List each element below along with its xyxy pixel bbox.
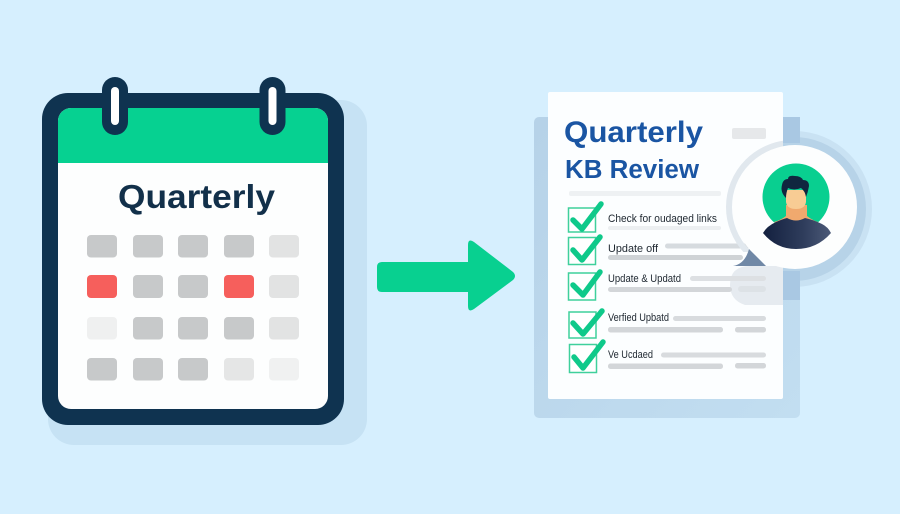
calendar ring left: [102, 77, 128, 135]
calendar page: [58, 108, 328, 409]
person shadow dark peak: [733, 249, 766, 266]
calendar frame: [42, 93, 344, 425]
item 1: Check for oudaged links: [608, 213, 718, 225]
white disc: [733, 145, 857, 269]
document title: KB Review: [565, 156, 699, 184]
divider bar: [569, 191, 721, 196]
item 5: [570, 342, 766, 372]
face: [786, 190, 806, 209]
green avatar background: [762, 164, 830, 230]
item 2: Update off: [608, 243, 659, 255]
item 4: [569, 311, 766, 338]
pale ring on page: [726, 140, 783, 252]
calendar heading: Quarterly: [118, 178, 276, 215]
calendar: [42, 77, 367, 445]
document page: [548, 92, 783, 399]
document title: Quarterly: [564, 116, 703, 149]
calendar shadow: [48, 100, 367, 445]
document: [534, 92, 872, 418]
calendar green header: [58, 108, 328, 163]
hair: [782, 176, 809, 198]
neck: [774, 205, 818, 236]
document title: [564, 116, 703, 184]
shirt: [763, 218, 831, 249]
arrow: [377, 241, 515, 310]
item 2: [568, 237, 750, 264]
tag placeholder: [732, 128, 766, 139]
faded person shadow: [730, 266, 783, 305]
item 1: [568, 204, 721, 232]
item 4: Verfied Upbatd: [608, 312, 669, 324]
calendar day grid: [87, 235, 299, 380]
item 5: Ve Ucdaed: [608, 349, 653, 361]
document back panel dark edge bottom: [783, 271, 800, 300]
item 3: [568, 272, 766, 300]
calendar ring right: [260, 77, 286, 135]
reviewer ring behind: [716, 131, 872, 287]
document back panel: [534, 117, 800, 418]
document back panel dark edge top: [783, 117, 800, 143]
checklist: [568, 204, 766, 372]
item 3: Update & Updatd: [608, 273, 681, 285]
reviewer badge: [733, 145, 857, 269]
